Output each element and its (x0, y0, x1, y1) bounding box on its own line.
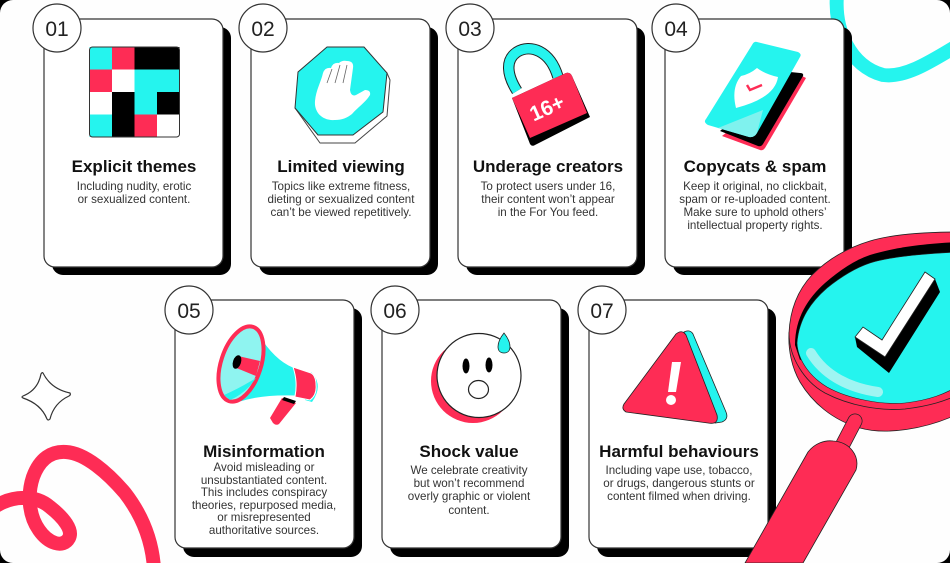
panel 02: limited viewing (239, 4, 438, 275)
body text 07: content filmed when driving. (607, 490, 751, 503)
number badge 01: 01 (45, 18, 69, 41)
body text 04: Keep it original, no clickbait, (683, 180, 827, 193)
body text 02: can’t be viewed repetitively. (271, 206, 411, 219)
body text 05: or misrepresented (217, 511, 311, 524)
body text 05: This includes conspiracy (201, 486, 327, 499)
body text 04 (679, 180, 831, 232)
number badge 04: 04 (664, 18, 688, 41)
number badge 03 (446, 4, 494, 52)
number badge 02: 02 (251, 18, 275, 41)
body text 07 (603, 464, 755, 503)
icon: copied phone with shield (705, 42, 806, 150)
panel 01: explicit themes (33, 4, 231, 275)
body text 05: Avoid misleading or (214, 461, 315, 474)
body text 02: dieting or sexualized content (268, 193, 415, 206)
number badge 07 (578, 286, 626, 334)
body text 06: but won’t recommend (414, 477, 524, 490)
decoration: cyan swirl top right (837, 0, 950, 75)
icon: shocked face (431, 333, 521, 423)
body text 07: or drugs, dangerous stunts or (603, 477, 755, 490)
heading 02: Limited viewing (277, 157, 405, 176)
decoration: four-point star (22, 373, 70, 420)
icon: pixel grid (90, 47, 180, 137)
heading 01: Explicit themes (72, 157, 196, 176)
icon: padlock 16+: 16+ (526, 91, 568, 126)
panel 07: harmful behaviours (578, 286, 776, 557)
body text 06 (408, 464, 531, 517)
panel 06: shock value (371, 286, 569, 557)
panel 03: underage creators (446, 4, 645, 275)
panel 05: misinformation (165, 286, 362, 557)
body text 05: authoritative sources. (209, 524, 319, 537)
body text 03: To protect users under 16, (481, 180, 615, 193)
body text 06: content. (448, 504, 490, 517)
heading 05: Misinformation (203, 442, 325, 461)
heading 04: Copycats & spam (684, 157, 826, 176)
number badge 01 (33, 4, 81, 52)
body text 02: Topics like extreme fitness, (272, 180, 410, 193)
body text 04: spam or re-uploaded content. (679, 193, 831, 206)
number badge 06 (371, 286, 419, 334)
body text 02 (268, 180, 415, 219)
heading 06: Shock value (419, 442, 519, 461)
body text 05: unsubstantiated content. (201, 474, 327, 487)
body text 01: Including nudity, erotic (77, 180, 191, 193)
icon: magnifying glass with check mark (745, 232, 950, 563)
icon: stop sign with hand (295, 47, 390, 143)
body text 06: We celebrate creativity (410, 464, 528, 477)
icon: megaphone (210, 321, 318, 425)
number badge 06: 06 (383, 300, 407, 323)
number badge 02 (239, 4, 287, 52)
heading 07: Harmful behaviours (599, 442, 759, 461)
number badge 05: 05 (177, 300, 201, 323)
body text 03: in the For You feed. (498, 206, 598, 219)
body text 05 (192, 461, 336, 537)
check mark (855, 272, 940, 373)
body text 01 (77, 180, 191, 206)
body text 03 (481, 180, 615, 219)
panel 04: copycats and spam (652, 4, 852, 275)
body text 01: or sexualized content. (78, 193, 190, 206)
body text 06: overly graphic or violent (408, 490, 531, 503)
icon: padlock 16+ (509, 49, 590, 146)
icon: warning triangle (623, 331, 727, 423)
body text 03: their content won’t appear (481, 193, 615, 206)
number badge 05 (165, 286, 213, 334)
number badge 04 (652, 4, 700, 52)
heading 03: Underage creators (473, 157, 623, 176)
decoration: red swirl bottom left (0, 452, 154, 563)
body text 04: Make sure to uphold others’ (683, 206, 827, 219)
body text 05: theories, repurposed media, (192, 499, 336, 512)
body text 04: intellectual property rights. (687, 219, 823, 232)
number badge 03: 03 (458, 18, 482, 41)
number badge 07: 07 (590, 300, 614, 323)
body text 07: Including vape use, tobacco, (606, 464, 752, 477)
